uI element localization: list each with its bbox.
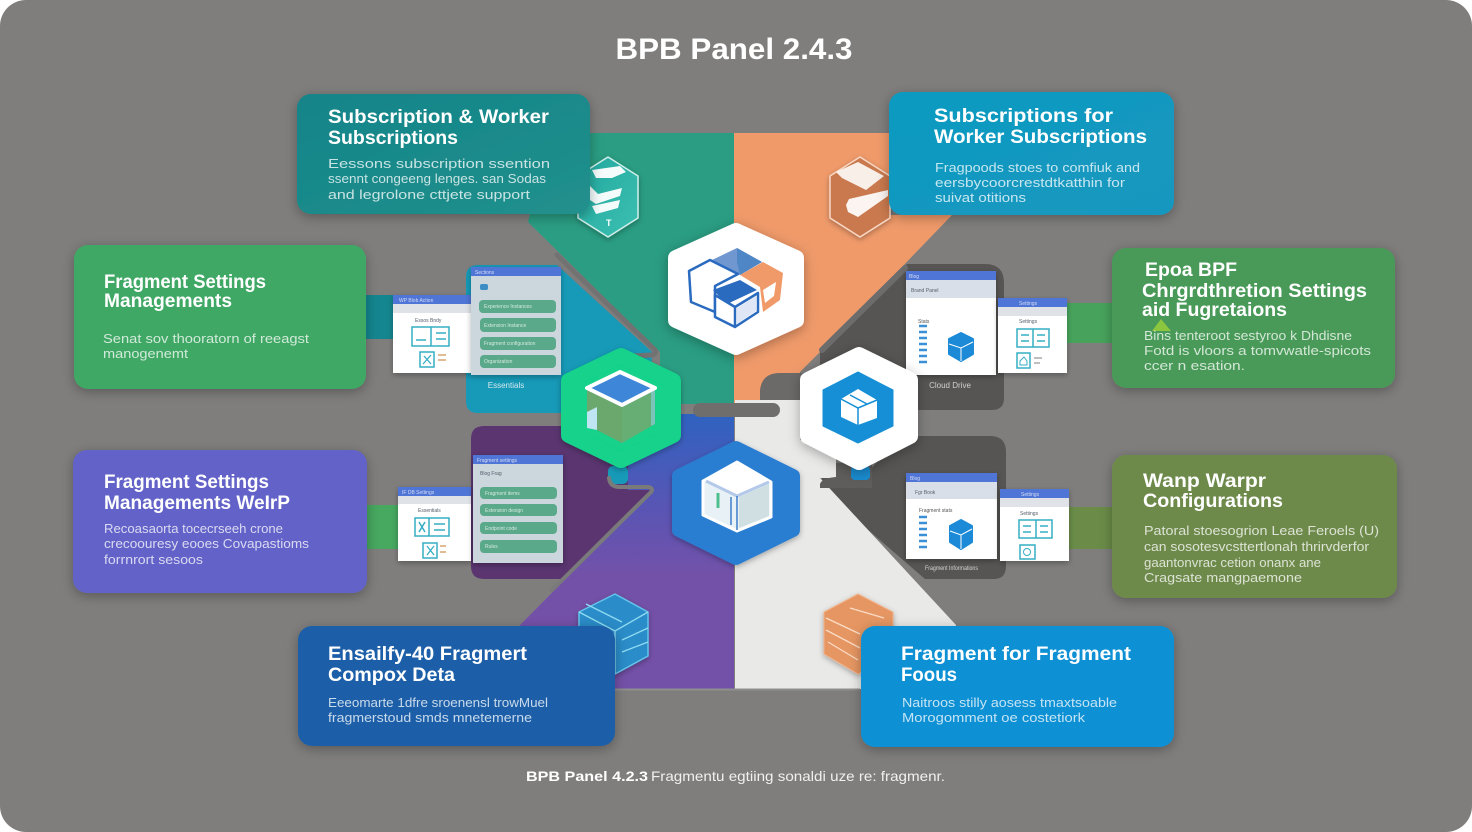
- icon: cube: [587, 372, 655, 443]
- window group: top left: [393, 267, 561, 390]
- window: small: Settings: [1019, 319, 1038, 325]
- card body: Bins tenteroot sestyroo k Dhdisne: [1144, 328, 1352, 343]
- card body: can sosotesvcsttertlonah thrirvderfor: [1144, 539, 1370, 554]
- card heading: [1143, 471, 1283, 512]
- card body: Senat sov thooratorn of reeagst: [103, 331, 309, 346]
- quadrant: dark grey behind top-right window: [820, 264, 1004, 410]
- quadrant: light grey: [735, 400, 956, 689]
- window: large: Extension design: [485, 508, 523, 514]
- card: subscription and worker: [297, 94, 590, 214]
- card body: and legrolone cttjete support: [328, 187, 530, 202]
- card body: [935, 160, 1140, 205]
- card body: ssennt congeeng lenges. san Sodas: [328, 171, 547, 186]
- card body: Fotd is vloors a tomvwatle-spicots: [1144, 343, 1372, 358]
- card heading: Compox Deta: [328, 665, 455, 686]
- window: large: Stats: [918, 319, 930, 325]
- window: large: Sections: [475, 270, 495, 276]
- card body: forrnrort sesoos: [104, 552, 204, 567]
- card heading: Subscriptions: [328, 128, 458, 149]
- window caption: Essentials: [488, 381, 524, 390]
- window: small: Settings: [1019, 301, 1038, 307]
- icon: inner blue hexagon: [823, 372, 893, 443]
- card body: eersbycoorcrestdtkatthin for: [935, 175, 1126, 190]
- window: large: Experience Instances: [484, 304, 532, 310]
- icon: blue block: [949, 333, 973, 361]
- card heading: Fragment Settings: [104, 472, 269, 493]
- footer caption: [526, 768, 945, 784]
- card heading: [901, 644, 1132, 686]
- card body: Morogomment oe costetiork: [902, 710, 1086, 725]
- card body: [902, 695, 1117, 725]
- card body: Recoasaorta tocecrseeh crone: [104, 521, 283, 536]
- icon: small orange hex: [830, 157, 890, 237]
- card body: ccer n esation.: [1144, 358, 1245, 373]
- window: large: Blog: [910, 476, 920, 482]
- window: large: Fragment items: [485, 491, 520, 497]
- connector: right top: [1060, 303, 1120, 343]
- quadrant: teal green: [528, 133, 734, 404]
- icon: orange block: [740, 262, 783, 312]
- window: large: Extension Instance: [484, 323, 526, 329]
- icon: small teal hex: T: [606, 218, 612, 228]
- window: large: [906, 473, 997, 559]
- window: large: Endpoint code: [485, 526, 517, 532]
- card: fragment settings managements warp: [73, 450, 367, 593]
- window: small: Settings: [1021, 492, 1040, 498]
- card heading: [934, 106, 1147, 148]
- footer caption regular: Fragmentu egtiing sonaldi uze re: fragmenr.: [651, 768, 945, 784]
- window: small: Settings: [1020, 511, 1039, 517]
- card body: Cragsate mangpaemone: [1144, 570, 1302, 585]
- window: large: [471, 267, 561, 375]
- card heading: Fragment for Fragment: [901, 644, 1132, 665]
- central diagram quadrants: [466, 133, 1006, 690]
- card body: [328, 156, 550, 202]
- icon: cube: [703, 462, 771, 531]
- card heading: [1142, 260, 1367, 321]
- quadrant: blue panel behind top-left window: [466, 265, 652, 413]
- connector: right bottom: [1060, 507, 1120, 549]
- card heading: Worker Subscriptions: [934, 127, 1147, 148]
- lower right tab: [820, 463, 872, 488]
- card body: Eeeomarte 1dfre sroenensl trowMuel: [328, 695, 548, 710]
- window: large: Rules: [485, 544, 498, 550]
- window group: top right: [906, 271, 1067, 390]
- card body: [104, 521, 310, 567]
- window: large: Fgr Book: [915, 490, 936, 496]
- icon: back block: [712, 248, 762, 275]
- card: fragment compox data: [298, 626, 615, 746]
- icon: small orange wireframe hex: [824, 594, 893, 674]
- window: large: Brand Panel: [911, 288, 939, 294]
- hexagon: white with blue inner hexagon: [808, 355, 910, 462]
- window group: lower right: [906, 473, 1069, 572]
- card heading: Chrgrdthretion Settings: [1142, 281, 1367, 302]
- card body: [328, 695, 548, 725]
- lower left blue tab: [608, 466, 628, 484]
- card heading: aid Fugretaions: [1142, 300, 1287, 321]
- window: large: Fragment configuration: [484, 341, 536, 347]
- card body: manogenemt: [103, 346, 188, 361]
- card heading: [328, 107, 550, 149]
- card heading: Configurations: [1143, 491, 1283, 512]
- hexagon: white with three cubes: [676, 231, 796, 347]
- diagonal edge: top right: [822, 268, 905, 350]
- card: fragment settings managements: [74, 245, 366, 389]
- window: large: Fragment stats: [919, 508, 953, 514]
- card heading: [104, 472, 290, 514]
- quadrant: blue to purple: [520, 414, 734, 689]
- card body: [1144, 328, 1372, 373]
- card: fragment for fragment focus: [861, 626, 1174, 747]
- window: small: [998, 298, 1067, 373]
- card heading: [328, 644, 528, 686]
- window caption: Fragment Informations: [925, 566, 978, 572]
- hexagon: blue with cube: [679, 448, 793, 558]
- card body: Naitroos stilly aosess tmaxtsoable: [902, 695, 1117, 710]
- card heading: Ensailfy-40 Fragmert: [328, 644, 528, 665]
- window: small: [398, 487, 471, 561]
- card body: Fragpoods stoes to comfiuk and: [935, 160, 1140, 175]
- connector pill: [693, 403, 780, 417]
- quadrant: orange: [734, 133, 952, 404]
- card heading: Foous: [901, 665, 957, 686]
- hexagon: green with cube: [569, 356, 673, 460]
- window: large: [473, 455, 563, 563]
- icon: small blue wireframe hex: [579, 594, 648, 674]
- card: chain settings and fragmentations: [1112, 248, 1395, 388]
- window: large: Organization: [484, 359, 513, 365]
- card heading: Subscriptions for: [934, 106, 1114, 127]
- card heading: [104, 272, 266, 312]
- card heading: Managements: [104, 291, 232, 312]
- title: BPB Panel 2.4.3: [616, 33, 852, 66]
- card body: [1144, 523, 1379, 585]
- quadrant: dark grey behind lower-right window: [822, 436, 1006, 579]
- window caption: Cloud Drive: [929, 381, 971, 390]
- window: large: Fragment settings: [477, 458, 518, 464]
- window: small: [1000, 489, 1069, 561]
- quadrant: dark purple behind lower-left window: [471, 426, 654, 579]
- lower left hook and diagonal edge: [552, 478, 652, 590]
- card body: gaantonvrac cetion onanx ane: [1144, 555, 1321, 570]
- window: small: [393, 295, 471, 373]
- icon: white cube: [841, 389, 877, 425]
- connector: left bottom: [360, 505, 405, 549]
- card: warp configurations: [1112, 455, 1397, 598]
- icon: small teal hex: [578, 157, 638, 237]
- card heading: Managements WeIrP: [104, 493, 290, 514]
- window: small: IF DB Settings: [402, 490, 435, 496]
- connector: left top: [360, 295, 400, 339]
- card heading: Subscription & Worker: [328, 107, 550, 128]
- card body: suivat otitions: [935, 190, 1027, 205]
- card body: Patoral stoesogrion Leae Feroels (U): [1144, 523, 1379, 538]
- icon: blue block: [950, 520, 972, 549]
- card heading: Epoa BPF: [1145, 260, 1237, 281]
- window group: lower left: [398, 455, 563, 563]
- card body: fragmerstoud smds mnetemerne: [328, 710, 532, 725]
- icon: green marker: [1152, 319, 1171, 331]
- window: small: Essentials: [418, 508, 441, 514]
- window: large: Blog Frag: [480, 471, 502, 477]
- icon: front blue block: [713, 280, 757, 304]
- dark grey tab: [760, 373, 815, 400]
- card body: Eessons subscription ssention: [328, 156, 550, 171]
- bottom edge: [615, 688, 860, 690]
- window: small: Essos Bndy: [415, 318, 442, 324]
- icon: left blue block: [689, 260, 738, 312]
- card: subscriptions for worker: [889, 92, 1174, 215]
- card body: [103, 331, 309, 361]
- window: large: Blog: [909, 274, 919, 280]
- window: large: [906, 271, 996, 375]
- window: small: WP Blob Action: [399, 298, 434, 304]
- footer caption bold: BPB Panel 4.2.3: [526, 768, 648, 784]
- card heading: Wanp Warpr: [1143, 471, 1267, 492]
- lower right blue tab: [851, 466, 870, 480]
- card body: crecoouresy eooes Covapastioms: [104, 536, 310, 551]
- diagonal edge: top left: [557, 255, 656, 356]
- card heading: Fragment Settings: [104, 272, 266, 293]
